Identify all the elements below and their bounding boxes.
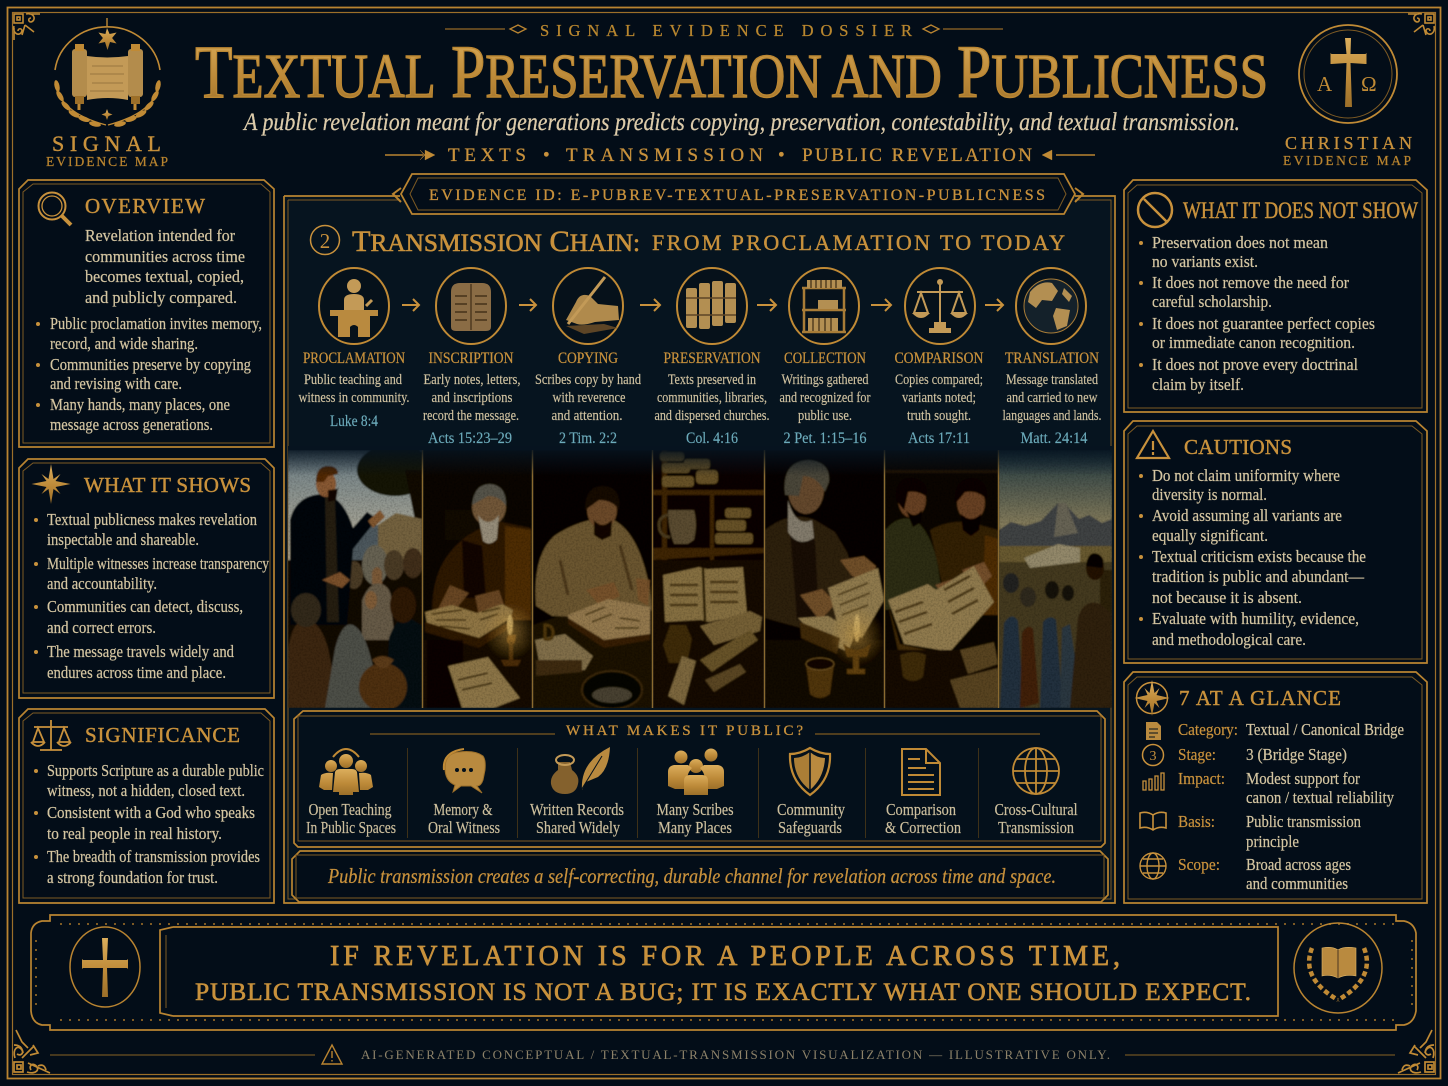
description xyxy=(1002,372,1102,424)
icon: bookshelf xyxy=(789,268,859,344)
icon: warning xyxy=(322,1045,342,1064)
step: translation xyxy=(1002,268,1102,447)
panel: cautions xyxy=(1124,421,1427,663)
label: COLLECTION xyxy=(784,350,866,367)
arrow xyxy=(402,299,419,311)
corner ornament: bottom left xyxy=(14,1030,50,1073)
description: languages and lands. xyxy=(1002,408,1102,424)
description xyxy=(895,372,983,424)
text: line two: PUBLIC TRANSMISSION IS NOT A BUG; IT IS EXACTLY WHAT ONE SHOULD EXPECT. xyxy=(195,977,1251,1006)
bullet list: not because it is absent. xyxy=(1152,588,1302,607)
description: Public teaching and xyxy=(304,372,403,388)
bullet list: Preservation does not mean xyxy=(1152,233,1328,252)
label: TRANSLATION xyxy=(1005,350,1099,367)
arrow xyxy=(871,299,891,311)
summary text: and publicly compared. xyxy=(85,288,237,307)
text: evidence map: EVIDENCE MAP xyxy=(46,154,168,169)
scene: translation xyxy=(999,450,1112,711)
description: Message translated xyxy=(1006,372,1099,388)
label: INSCRIPTION xyxy=(428,350,514,367)
heading: CAUTIONS xyxy=(1184,435,1292,459)
item: written records xyxy=(530,747,624,837)
bullet list xyxy=(1139,466,1366,649)
summary text: Revelation intended for xyxy=(85,226,235,245)
row: category: Textual / Canonical Bridge xyxy=(1246,720,1404,739)
icon: globe xyxy=(1016,268,1086,344)
item: open teaching: Open Teaching xyxy=(308,800,392,819)
step: copying xyxy=(535,268,642,447)
icon: cross medallion xyxy=(70,927,140,1007)
icon: hand with quill xyxy=(553,268,623,344)
bullet list: and correct errors. xyxy=(47,618,156,637)
heading: WHAT IT SHOWS xyxy=(84,473,251,497)
header: kicker xyxy=(445,21,1003,40)
reference: 2 Tim. 2:2 xyxy=(559,430,617,447)
bullet list xyxy=(34,761,264,887)
item: comparison and correction: Comparison xyxy=(886,800,956,819)
row: impact: Modest support for xyxy=(1246,769,1360,788)
label: PROCLAMATION xyxy=(303,350,405,367)
icon: warning triangle xyxy=(1137,431,1169,458)
row: category: Category: xyxy=(1178,720,1238,739)
quote box xyxy=(160,927,1278,1016)
icon: balance scales xyxy=(905,268,975,344)
bullet list: Communities can detect, discuss, xyxy=(47,597,243,616)
corner ornament: bottom right xyxy=(1398,1030,1434,1073)
description: witness in community. xyxy=(298,390,410,406)
icon: star xyxy=(98,28,117,50)
description xyxy=(423,372,520,424)
bullet list: endures across time and place. xyxy=(47,663,226,682)
summary text: communities across time xyxy=(85,247,245,266)
tagline: • xyxy=(543,145,550,166)
bullet list: witness, not a hidden, closed text. xyxy=(47,781,245,800)
icon: magnifier xyxy=(38,192,71,225)
item: memory and oral witness: Oral Witness xyxy=(428,818,500,837)
tagline: • xyxy=(778,145,785,166)
scene: inscription xyxy=(423,450,536,708)
icon: compass star xyxy=(32,464,70,504)
item: open teaching: In Public Spaces xyxy=(306,818,396,837)
icon: book and laurel medallion xyxy=(1294,923,1382,1013)
row: scope: and communities xyxy=(1246,874,1348,893)
item: written records: Written Records xyxy=(530,800,624,819)
bullet list: diversity is normal. xyxy=(1152,485,1267,504)
arrow xyxy=(985,299,1003,311)
heading: 2 xyxy=(320,229,330,253)
description: variants noted; xyxy=(902,390,976,406)
text: christian: CHRISTIAN xyxy=(1285,133,1412,153)
bullet list: Supports Scripture as a durable public xyxy=(47,761,264,780)
bullet list: tradition is public and abundant— xyxy=(1152,567,1365,586)
header: kicker: SIGNAL EVIDENCE DOSSIER xyxy=(540,21,912,40)
step: preservation xyxy=(654,268,770,447)
row: scope: Broad across ages xyxy=(1246,855,1351,874)
scene dividers xyxy=(422,450,998,708)
bullet list: message across generations. xyxy=(50,415,213,434)
footer disclaimer: AI-GENERATED CONCEPTUAL / TEXTUAL-TRANSMISSION VISUALIZATION — ILLUSTRATIVE ONLY. xyxy=(361,1047,1110,1062)
icon: speaker at podium xyxy=(319,268,389,344)
bullet list: Many hands, many places, one xyxy=(50,395,230,414)
description xyxy=(535,372,642,424)
bullet list: Textual publicness makes revelation xyxy=(47,510,257,529)
reference: Luke 8:4 xyxy=(330,413,378,430)
banner: conclusion xyxy=(31,915,1416,1030)
icon: prohibition sign xyxy=(1138,193,1172,227)
bullet list: or immediate canon recognition. xyxy=(1152,333,1355,352)
heading: 7 AT A GLANCE xyxy=(1179,686,1341,710)
bullet list xyxy=(36,314,262,434)
bullet list: Multiple witnesses increase transparency xyxy=(47,554,269,573)
bullet list: Evaluate with humility, evidence, xyxy=(1152,609,1359,628)
corner ornament: top left xyxy=(14,14,40,40)
bullet list: equally significant. xyxy=(1152,526,1268,545)
description: and carried to new xyxy=(1006,390,1098,406)
bullet list: and accountability. xyxy=(47,574,157,593)
bullet list: Do not claim uniformity where xyxy=(1152,466,1340,485)
scene: preservation xyxy=(653,450,764,708)
summary text xyxy=(85,226,245,307)
item: community safeguards: Safeguards xyxy=(778,818,842,837)
bullet list: no variants exist. xyxy=(1152,252,1258,271)
item: memory and oral witness xyxy=(428,749,500,837)
text: signal: SIGNAL xyxy=(52,131,161,156)
icon: compass xyxy=(1134,680,1170,716)
reference: Acts 15:23–29 xyxy=(428,430,512,447)
bullet list: Consistent with a God who speaks xyxy=(47,803,255,822)
description xyxy=(780,372,871,424)
item: cross-cultural transmission xyxy=(994,748,1078,837)
footer disclaimer xyxy=(50,1045,1395,1064)
bullet list: and revising with care. xyxy=(50,374,182,393)
reference: Acts 17:11 xyxy=(908,430,970,447)
icon: scroll xyxy=(72,44,143,110)
row: stage xyxy=(1142,744,1347,766)
text: evidence map: EVIDENCE MAP xyxy=(1283,153,1411,168)
bullet list: to real people in real history. xyxy=(47,824,222,843)
scene: comparison xyxy=(885,450,998,708)
reference: Matt. 24:14 xyxy=(1020,430,1088,447)
item: open teaching xyxy=(306,749,396,837)
item: written records: Shared Widely xyxy=(536,818,621,837)
subtitle: A public revelation meant for generations predicts copying, preservation, contestability, and textual transmission. xyxy=(242,109,1240,136)
bullet list: Avoid assuming all variants are xyxy=(1152,506,1342,525)
bullet list: inspectable and shareable. xyxy=(47,530,199,549)
heading: OVERVIEW xyxy=(85,194,205,218)
heading: SIGNIFICANCE xyxy=(85,723,240,747)
description: truth sought. xyxy=(907,408,971,424)
panel: what it does not show xyxy=(1124,180,1427,412)
scene: proclamation xyxy=(288,450,422,708)
description xyxy=(298,372,410,406)
bullet list: Communities preserve by copying xyxy=(50,355,251,374)
top fade xyxy=(288,446,1112,476)
bullet list: a strong foundation for trust. xyxy=(47,868,218,887)
tagline xyxy=(385,145,1095,166)
panel: what makes it public xyxy=(294,711,1105,847)
item: many scribes: Many Places xyxy=(658,818,732,837)
row: impact: Impact: xyxy=(1178,769,1225,788)
text: alpha omega xyxy=(1317,72,1377,96)
bullet list: and methodological care. xyxy=(1152,630,1306,649)
corner ornament: top right xyxy=(1408,14,1434,35)
tagline: PUBLIC REVELATION xyxy=(802,145,1032,166)
panel: significance xyxy=(19,709,274,903)
description: record the message. xyxy=(423,408,519,424)
step: inscription xyxy=(423,268,520,447)
label: COMPARISON xyxy=(894,350,984,367)
description: and dispersed churches. xyxy=(654,408,770,424)
item: comparison and correction xyxy=(885,749,961,837)
scene: collection xyxy=(765,450,885,708)
icon: laurel wreath xyxy=(53,80,162,128)
arrow xyxy=(519,299,536,311)
heading: TRANSMISSION CHAIN: xyxy=(352,225,640,258)
bullet list: It does not remove the need for xyxy=(1152,273,1349,292)
callout: public transmission xyxy=(292,851,1108,902)
description: communities, libraries, xyxy=(657,390,767,406)
row: category xyxy=(1146,720,1404,740)
bullet list: careful scholarship. xyxy=(1152,292,1272,311)
item: many scribes: Many Scribes xyxy=(656,800,734,819)
bullet list: The breadth of transmission provides xyxy=(47,847,260,866)
row: basis xyxy=(1140,812,1361,851)
description: public use. xyxy=(798,408,852,424)
row: scope xyxy=(1140,853,1351,893)
callout: public transmission: Public transmission creates a self-correcting, durable channel for revelation across time and space. xyxy=(327,864,1056,888)
text: alpha omega: Α xyxy=(1317,72,1333,96)
bullet list xyxy=(1139,233,1375,394)
item: cross-cultural transmission: Cross-Cultural xyxy=(994,800,1078,819)
scene: copying xyxy=(533,450,652,709)
item: many scribes xyxy=(656,748,734,837)
logo: signal scroll emblem xyxy=(46,18,168,169)
title: TEXTUAL PRESERVATION AND PUBLICNESS xyxy=(195,31,1268,114)
description: Writings gathered xyxy=(782,372,869,388)
description: Early notes, letters, xyxy=(424,372,520,388)
description: Copies compared; xyxy=(895,372,983,388)
text: alpha omega: Ω xyxy=(1361,72,1377,96)
dividers xyxy=(408,748,978,838)
tagline: TRANSMISSION xyxy=(566,145,763,166)
row: impact: canon / textual reliability xyxy=(1246,788,1394,807)
row: basis: Public transmission xyxy=(1246,812,1361,831)
item: community safeguards: Community xyxy=(777,800,846,819)
row: basis: Basis: xyxy=(1178,812,1215,831)
label: COPYING xyxy=(558,350,618,367)
heading: WHAT MAKES IT PUBLIC? xyxy=(566,723,803,739)
summary text: becomes textual, copied, xyxy=(85,267,244,286)
banner: evidence id: EVIDENCE ID: E-PUBREV-TEXTUAL-PRESERVATION-PUBLICNESS xyxy=(429,187,1045,204)
row: scope: Scope: xyxy=(1178,855,1220,874)
step: proclamation xyxy=(298,268,410,430)
bullet list xyxy=(34,510,269,682)
row: basis: principle xyxy=(1246,832,1299,851)
text: line one: IF REVELATION IS FOR A PEOPLE ACROSS TIME, xyxy=(330,941,1120,972)
panel: at a glance xyxy=(1124,672,1427,903)
icon: scrolls xyxy=(677,268,747,344)
row: stage: 3 (Bridge Stage) xyxy=(1246,745,1347,764)
heading: FROM PROCLAMATION TO TODAY xyxy=(652,230,1065,255)
bullet list: It does not prove every doctrinal xyxy=(1152,355,1358,374)
panel: what it shows xyxy=(19,459,274,698)
row: stage: 3 xyxy=(1150,749,1156,764)
item: comparison and correction: & Correction xyxy=(885,818,961,837)
description: Texts preserved in xyxy=(668,372,757,388)
description: and attention. xyxy=(552,408,622,424)
icon: stone tablets xyxy=(436,268,506,344)
heading xyxy=(310,225,1065,258)
bullet list: Textual criticism exists because the xyxy=(1152,547,1366,566)
scene noise texture xyxy=(288,450,1112,708)
description: and inscriptions xyxy=(432,390,513,406)
bullet list: Public proclamation invites memory, xyxy=(50,314,262,333)
reference: Col. 4:16 xyxy=(686,430,738,447)
description xyxy=(654,372,770,424)
item: community safeguards xyxy=(777,748,846,837)
tagline: TEXTS xyxy=(448,145,526,166)
description: with reverence xyxy=(552,390,626,406)
icon: cross xyxy=(1330,38,1366,107)
bullet list: claim by itself. xyxy=(1152,375,1244,394)
illustration band: seven scenes xyxy=(288,444,1112,711)
row: impact xyxy=(1143,769,1394,807)
description: and recognized for xyxy=(780,390,871,406)
reference: 2 Pet. 1:15–16 xyxy=(784,430,867,447)
banner: evidence id xyxy=(393,174,1083,214)
bullet list: It does not guarantee perfect copies xyxy=(1152,314,1375,333)
item: cross-cultural transmission: Transmission xyxy=(998,818,1074,837)
panel: transmission chain xyxy=(31,174,1427,1064)
bullet list: record, and wide sharing. xyxy=(50,334,198,353)
step: comparison xyxy=(894,268,984,447)
label: PRESERVATION xyxy=(664,350,761,367)
arrow xyxy=(757,299,776,311)
bullet list: The message travels widely and xyxy=(47,642,234,661)
panel: overview xyxy=(19,180,274,447)
item: memory and oral witness: Memory & xyxy=(434,800,493,819)
description: Scribes copy by hand xyxy=(535,372,642,388)
row: stage: Stage: xyxy=(1178,745,1216,764)
logo: christian cross emblem xyxy=(1283,25,1412,168)
arrow xyxy=(640,299,660,311)
step: collection xyxy=(780,268,871,447)
icon: scales xyxy=(31,720,71,750)
